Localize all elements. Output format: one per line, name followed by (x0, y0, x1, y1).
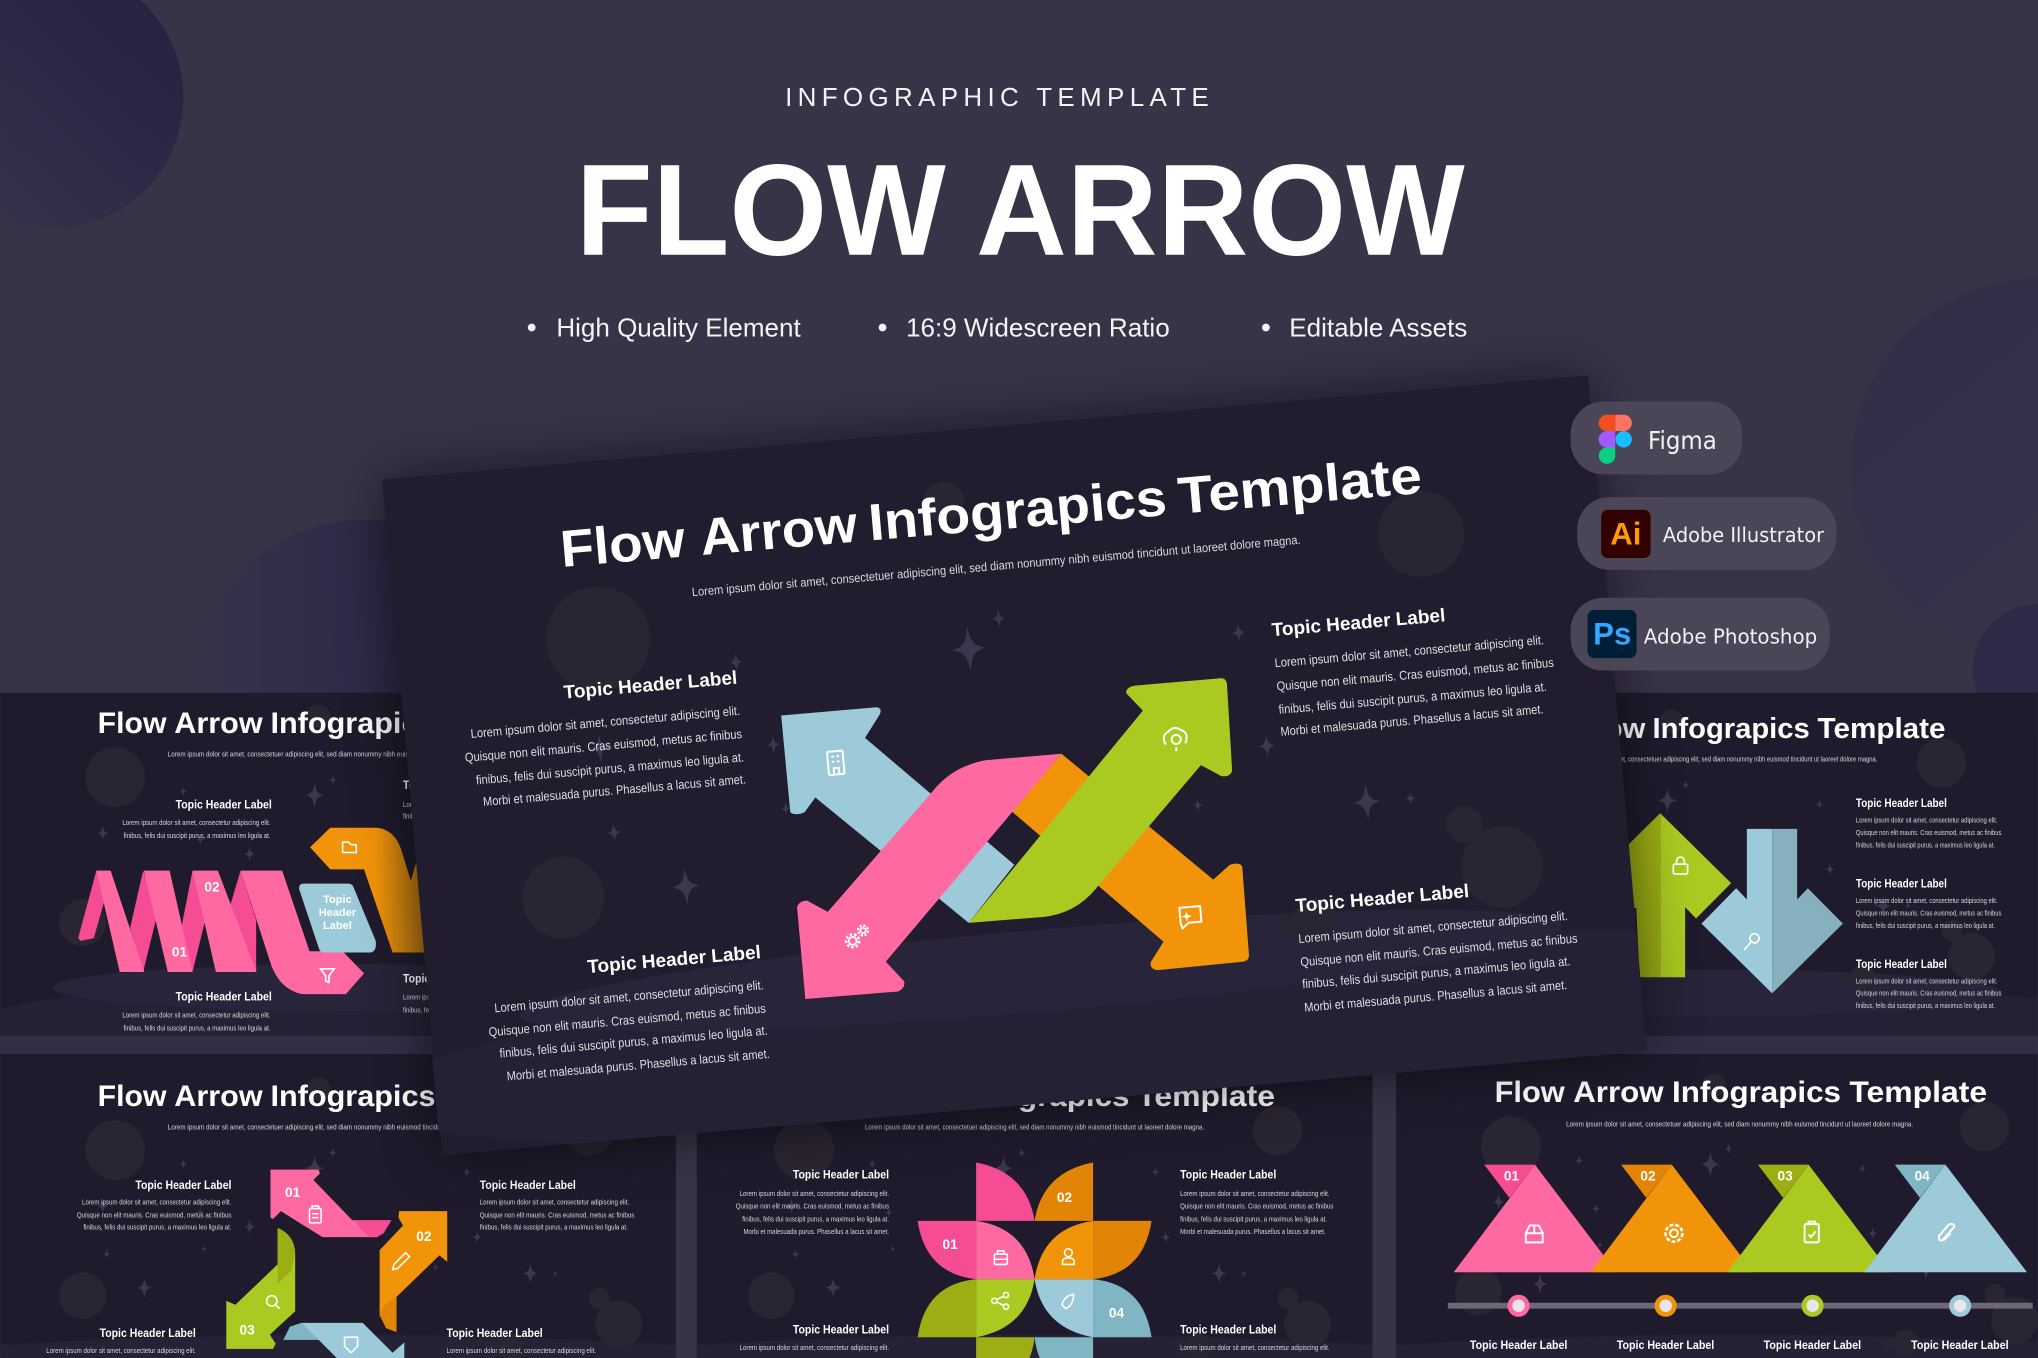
text block: lower right (1295, 871, 1582, 1015)
text block: lower left: Morbi et malesuada purus. Phasellus a lacus sit amet. (506, 1046, 770, 1083)
panel: top-left slide: Template (443, 707, 578, 740)
panel: bottom-left slide: Lorem ipsum dolor sit amet, consectetur adipiscing elit. (480, 1198, 629, 1207)
text block: upper left: Lorem ipsum dolor sit amet, consectetur adipiscing elit. (470, 703, 741, 741)
triangle arrow row: 02 (1640, 1169, 1656, 1184)
panel: bottom-middle slide: Topic Header Label (1180, 1323, 1276, 1336)
panel: top-right slide: Lorem ipsum dolor sit amet, consectetuer adipiscing elit, sed diam nonummy nibh euismod tincidunt ut laoreet dolore magna. (1554, 755, 1877, 764)
blue arrow 04 (283, 1323, 404, 1358)
panel: bottom-left slide: finibus, felis dui suscipit purus, a maximus leo ligula at. (83, 1222, 231, 1231)
timeline labels: Topic Header Label (1470, 1339, 1567, 1352)
panel: top-left slide: Arrow (174, 707, 263, 740)
green arrow 03 (226, 1228, 295, 1349)
timeline (1448, 1295, 2033, 1317)
text block: lower right: Morbi et malesuada purus. Phasellus a lacus sit amet. (1304, 977, 1568, 1015)
feature bullets (528, 313, 1467, 343)
panel: bottom-left slide: Lorem ipsum dolor sit amet, consectetur adipiscing elit. (82, 1198, 231, 1207)
text block: upper right (1271, 595, 1558, 739)
text block: upper right: Topic Header Label (1271, 604, 1446, 640)
zigzag pink arrow: 02 (204, 879, 220, 894)
panel: top-right slide: finibus, felis dui suscipit purus, a maximus leo ligula at. (1856, 840, 1995, 849)
zigzag pink arrow: 01 (172, 944, 188, 959)
panel: bottom-right slide: Arrow (1573, 1076, 1664, 1109)
feature bullets: High Quality Element (556, 313, 801, 343)
panel: bottom-right slide: Infograpics (1672, 1076, 1841, 1109)
panel: top-right slide: Flow (1488, 713, 1554, 745)
panel: top-right slide: finibus, felis dui suscipit purus, a maximus leo ligula at. (1856, 1001, 1995, 1010)
panel: bottom-middle slide: Topic Header Label (793, 1169, 889, 1182)
text block: upper right: Quisque non elit mauris. Cras euismod, metus ac finibus (1276, 655, 1554, 694)
panel: top-right slide: Template (1818, 713, 1946, 745)
panel: bottom-left slide: finibus, felis dui suscipit purus, a maximus leo ligula at. (480, 1222, 628, 1231)
pink arrow 01 (270, 1170, 391, 1237)
panel: top-right slide: Topic Header Label (1856, 797, 1947, 810)
green up arrow (1628, 813, 1731, 977)
panel: bottom-middle slide: Template (1137, 1080, 1275, 1113)
text block: upper left (459, 667, 747, 810)
orange arrow 02 (380, 1211, 447, 1332)
text block: lower right: Topic Header Label (1295, 880, 1470, 916)
panel: bottom-middle slide: Morbi et malesuada purus. Phasellus a lacus sit amet. (744, 1227, 889, 1236)
panel: top-left slide: Topic Header Label (176, 991, 272, 1004)
panel: bottom-left slide: Topic Header Label (100, 1327, 196, 1340)
panel: bottom-middle slide (697, 1054, 1372, 1358)
panel: bottom-right slide: Lorem ipsum dolor sit amet, consectetuer adipiscing elit, sed diam nonummy nibh euismod tincidunt ut laoreet dolore magna. (1566, 1120, 1913, 1129)
panel: bottom-right slide: Flow (1495, 1076, 1566, 1109)
callout label box: Label (323, 920, 352, 932)
panel: bottom-middle slide: Quisque non elit mauris. Cras euismod, metus ac finibus (1180, 1202, 1334, 1211)
pill: Figma (1571, 402, 1742, 474)
panel: bottom-middle slide: Lorem ipsum dolor sit amet, consectetuer adipiscing elit, sed diam nonummy nibh euismod tincidunt ut laoreet dolore magna. (865, 1122, 1204, 1131)
arrow: pink down-left (797, 754, 1061, 999)
panel: bottom-middle slide: Infograpics (961, 1080, 1129, 1113)
panel: top-left slide: Lorem ipsum dolor sit amet, consectetuer adipiscing elit, sed diam nonummy nibh euismod tincidunt ut laoreet dolore magna. (168, 749, 516, 758)
text block: upper right: Morbi et malesuada purus. Phasellus a lacus sit amet. (1280, 701, 1544, 739)
text block: upper left: Morbi et malesuada purus. Phasellus a lacus sit amet. (482, 771, 747, 809)
main slide title (558, 447, 1424, 579)
arrow: orange down-right (1012, 754, 1249, 970)
panel: top-left slide: finibus, felis dui suscipit purus, a maximus leo ligula at. (124, 1024, 270, 1033)
text block: lower right: Quisque non elit mauris. Cras euismod, metus ac finibus (1300, 931, 1578, 969)
panel: bottom-middle slide: Lorem ipsum dolor sit amet, consectetur adipiscing elit. (1180, 1189, 1330, 1198)
text block: upper left: finibus, felis dui suscipit purus, a maximus leo ligula at. (475, 749, 745, 787)
panel: bottom-middle slide: Morbi et malesuada purus. Phasellus a lacus sit amet. (1180, 1227, 1326, 1236)
panel: bottom-middle slide: finibus, felis dui suscipit purus, a maximus leo ligula at. (1180, 1215, 1327, 1224)
pill: Adobe Illustrator: Ai (1610, 516, 1641, 551)
triangle arrow row (1454, 1165, 2027, 1272)
panel: bottom-right slide: Template (1849, 1076, 1987, 1109)
flower petal chart: 02 (1057, 1190, 1072, 1205)
triangle arrow row: 03 (1777, 1169, 1793, 1184)
panel: top-right slide: Lorem ipsum dolor sit amet, consectetur adipiscing elit. (1856, 896, 1998, 905)
panel: bottom-middle slide: Arrow (862, 1080, 953, 1113)
panel: top-left slide: Lorem ipsum dolor sit amet, consectetur adipiscing elit. (403, 800, 551, 809)
pill: Adobe Photoshop (1571, 598, 1830, 671)
text block: lower right: finibus, felis dui suscipit purus, a maximus leo ligula at. (1302, 953, 1571, 991)
callout label box (299, 884, 376, 953)
pill: Adobe Photoshop: Adobe Photoshop (1644, 624, 1817, 648)
text block: upper right: Lorem ipsum dolor sit amet, consectetur adipiscing elit. (1274, 632, 1545, 670)
panel: top-right slide: Quisque non elit mauris. Cras euismod, metus ac finibus (1856, 909, 2002, 918)
orange arrow 02: 02 (416, 1229, 432, 1244)
panel: bottom-middle slide: Topic Header Label (1180, 1169, 1276, 1182)
callout label box: Header (319, 907, 357, 919)
timeline labels (1470, 1339, 2009, 1352)
green arrow 03: 03 (240, 1323, 255, 1338)
panel: top-right slide: Quisque non elit mauris. Cras euismod, metus ac finibus (1856, 828, 2002, 837)
pill: Figma: Figma (1648, 426, 1717, 455)
panel: bottom-right slide (1396, 1054, 2038, 1358)
panel: bottom-middle slide: finibus, felis dui suscipit purus, a maximus leo ligula at. (742, 1215, 889, 1224)
pill: Adobe Photoshop: Ps (1593, 617, 1631, 652)
panel: top-left slide: finibus, felis dui suscipit purus, a maximus leo ligula at. (124, 831, 270, 840)
panel: top-left slide: Topic Header Label (403, 972, 499, 985)
panel: top-right slide: finibus, felis dui suscipit purus, a maximus leo ligula at. (1856, 921, 1995, 930)
panel: top-left slide: Topic Header Label (403, 779, 499, 792)
panel: bottom-middle slide: Flow (784, 1080, 855, 1113)
text block: upper right: finibus, felis dui suscipit purus, a maximus leo ligula at. (1278, 679, 1547, 717)
panel: bottom-middle slide: Lorem ipsum dolor sit amet, consectetur adipiscing elit. (740, 1189, 889, 1198)
ribbon orange arrow (310, 828, 429, 953)
arrow: blue up-left (781, 707, 1014, 923)
panel: top-left slide: Lorem ipsum dolor sit amet, consectetur adipiscing elit. (403, 992, 551, 1001)
panel: bottom-left slide: Lorem ipsum dolor sit amet, consectetur adipiscing elit. (46, 1346, 196, 1355)
panel: top-left slide: Lorem ipsum dolor sit amet, consectetur adipiscing elit. (122, 818, 270, 827)
timeline labels: Topic Header Label (1764, 1339, 1861, 1352)
panel: top-left slide: Topic Header Label (176, 798, 272, 811)
panel: top-left slide (0, 692, 432, 1036)
panel: top-right slide: Arrow (1561, 713, 1646, 745)
flower petal chart: 01 (943, 1237, 958, 1252)
text block: lower left: finibus, felis dui suscipit purus, a maximus leo ligula at. (499, 1023, 768, 1061)
triangle arrow row: 01 (1504, 1169, 1520, 1184)
panel: bottom-left slide: Arrow (174, 1080, 263, 1113)
main slide subtitle: Lorem ipsum dolor sit amet, consectetuer adipiscing elit, sed diam nonummy nibh euismod tincidunt ut laoreet dolore magna. (691, 533, 1301, 599)
text block: lower left: Topic Header Label (586, 941, 762, 977)
panel: bottom-left slide: Infograpics (270, 1080, 436, 1113)
pink arrow 01: 01 (285, 1185, 301, 1200)
pill: Adobe Illustrator: Adobe Illustrator (1663, 523, 1824, 547)
text block: upper left: Quisque non elit mauris. Cras euismod, metus ac finibus (464, 726, 743, 765)
panel: bottom-left slide: Template (443, 1080, 578, 1113)
panel: top-right slide: Quisque non elit mauris. Cras euismod, metus ac finibus (1856, 988, 2002, 997)
icon: Figma logo (1599, 415, 1632, 464)
panel: top-left slide: Lorem ipsum dolor sit amet, consectetur adipiscing elit. (122, 1011, 270, 1020)
main title: FLOW ARROW (576, 137, 1465, 283)
panel: top-right slide: Lorem ipsum dolor sit amet, consectetur adipiscing elit. (1856, 816, 1998, 825)
text block: lower left: Quisque non elit mauris. Cras euismod, metus ac finibus (488, 1001, 766, 1039)
triangle arrow row: 04 (1915, 1169, 1930, 1184)
panel: top-left slide: Flow (98, 707, 167, 740)
main slide title: Infograpics (866, 469, 1169, 552)
panel: main slide (319, 376, 1870, 1188)
feature bullets: 16:9 Widescreen Ratio (906, 313, 1170, 343)
text block: lower left (483, 941, 770, 1085)
panel: bottom-left slide (0, 1054, 676, 1358)
callout label box: Topic (323, 894, 352, 906)
panel: top-right slide: Topic Header Label (1856, 958, 1947, 971)
panel: top-left slide: finibus, felis dui suscipit purus, a maximus leo ligula at. (403, 812, 550, 821)
text block: lower right: Lorem ipsum dolor sit amet, consectetur adipiscing elit. (1298, 908, 1568, 946)
eyebrow heading: INFOGRAPHIC TEMPLATE (785, 82, 1209, 112)
timeline labels: Topic Header Label (1617, 1339, 1714, 1352)
panel: top-right slide: Infograpics (1653, 713, 1810, 745)
panel: bottom-left slide: Quisque non elit mauris. Cras euismod, metus ac finibus (480, 1211, 635, 1220)
arrow: green up-right (969, 678, 1232, 923)
flower petal chart: 04 (1109, 1306, 1124, 1321)
panel: top-left slide: finibus, felis dui suscipit purus, a maximus leo ligula at. (403, 1005, 550, 1014)
panel: bottom-middle slide: Lorem ipsum dolor sit amet, consectetur adipiscing elit. (1180, 1343, 1330, 1352)
panel: top-right slide: Lorem ipsum dolor sit amet, consectetur adipiscing elit. (1856, 977, 1998, 986)
panel: bottom-left slide: Quisque non elit mauris. Cras euismod, metus ac finibus (77, 1211, 232, 1220)
blue down arrow (1702, 829, 1843, 993)
text block: upper left: Topic Header Label (563, 667, 738, 703)
zigzag pink arrow (78, 871, 364, 994)
panel: bottom-left slide: Flow (98, 1080, 167, 1113)
text block: lower left: Lorem ipsum dolor sit amet, consectetur adipiscing elit. (494, 977, 764, 1015)
pill: Adobe Illustrator (1577, 497, 1836, 570)
main slide title: Flow (558, 510, 688, 579)
panel: bottom-middle slide: Quisque non elit mauris. Cras euismod, metus ac finibus (736, 1202, 889, 1211)
panel: top-right slide: Topic Header Label (1856, 878, 1947, 891)
panel: top-right slide (1616, 692, 2038, 1036)
timeline labels: Topic Header Label (1911, 1339, 2009, 1352)
panel: bottom-left slide: Lorem ipsum dolor sit amet, consectetuer adipiscing elit, sed diam nonummy nibh euismod tincidunt ut laoreet dolore magna. (168, 1122, 516, 1131)
flower petal chart (918, 1163, 1152, 1358)
panel: bottom-left slide: Topic Header Label (135, 1179, 231, 1192)
panel: top-left slide: Infograpics (270, 707, 436, 740)
panel: bottom-left slide: Topic Header Label (447, 1327, 543, 1340)
main slide title: Template (1176, 447, 1424, 526)
panel: bottom-left slide: Lorem ipsum dolor sit amet, consectetur adipiscing elit. (447, 1346, 596, 1355)
main slide title: Arrow (698, 496, 860, 567)
panel: bottom-left slide: Topic Header Label (480, 1179, 576, 1192)
panel: bottom-middle slide: Lorem ipsum dolor sit amet, consectetur adipiscing elit. (740, 1343, 889, 1352)
panel: bottom-middle slide: Topic Header Label (793, 1323, 889, 1336)
feature bullets: Editable Assets (1289, 313, 1467, 343)
